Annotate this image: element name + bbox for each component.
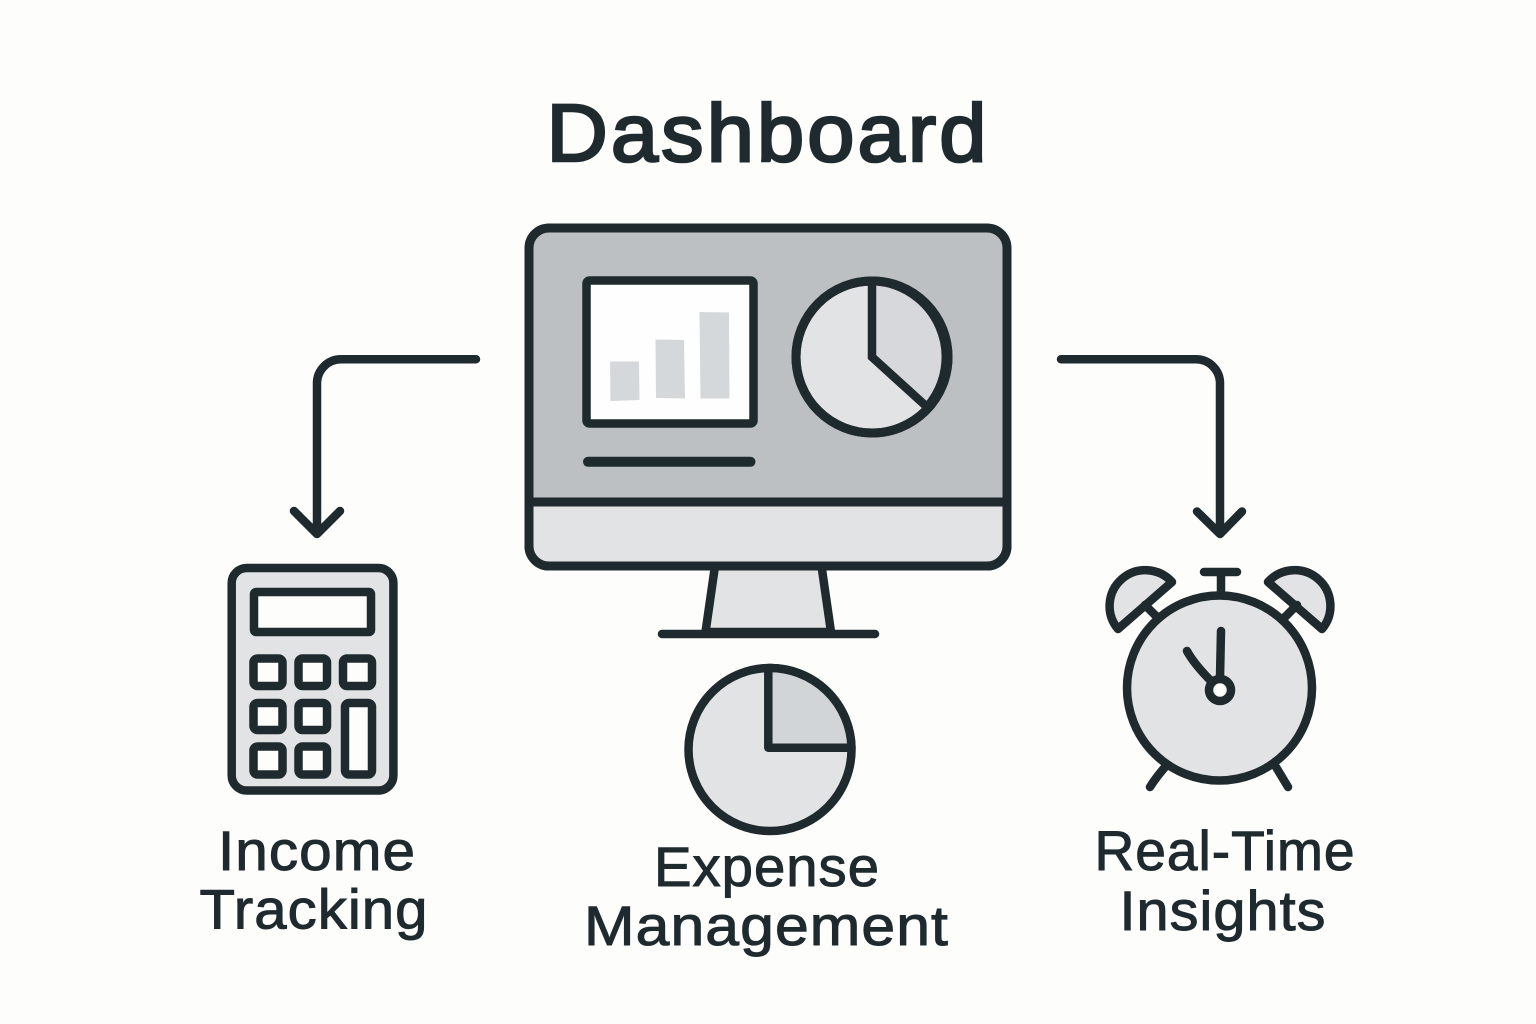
- label: real-time insights: Real-Time: [1094, 819, 1356, 882]
- arrow: to income tracking: [294, 359, 476, 534]
- clock face: [1127, 596, 1312, 780]
- label: expense management: [584, 835, 949, 957]
- icon: expense pie chart: [688, 668, 852, 831]
- label: expense management: Expense: [654, 835, 880, 898]
- label: income tracking: Income: [218, 819, 416, 882]
- monitor stand: [706, 566, 831, 632]
- icon: alarm clock: [1110, 570, 1330, 787]
- label: income tracking: Tracking: [200, 878, 428, 940]
- title: Dashboard: [546, 88, 990, 179]
- label: real-time insights: Insights: [1120, 879, 1326, 942]
- label: income tracking: [200, 819, 428, 940]
- clock hub: [1209, 679, 1231, 701]
- pie chart on screen: [796, 281, 948, 433]
- arrow: to real-time insights: [1061, 359, 1242, 534]
- screen text line: [588, 457, 750, 467]
- monitor chin: [529, 502, 1007, 566]
- left bell: [1110, 570, 1172, 629]
- label: real-time insights: [1094, 819, 1356, 942]
- bar chart panel: [586, 280, 754, 424]
- label: expense management: Management: [584, 894, 949, 957]
- icon: desktop monitor: [529, 228, 1007, 634]
- monitor base: [662, 630, 875, 638]
- icon: calculator: [232, 568, 393, 790]
- monitor body: [529, 228, 1007, 566]
- right bell: [1268, 570, 1330, 629]
- clock stems, knob and feet: [1145, 572, 1297, 787]
- clock hands: [1187, 631, 1221, 682]
